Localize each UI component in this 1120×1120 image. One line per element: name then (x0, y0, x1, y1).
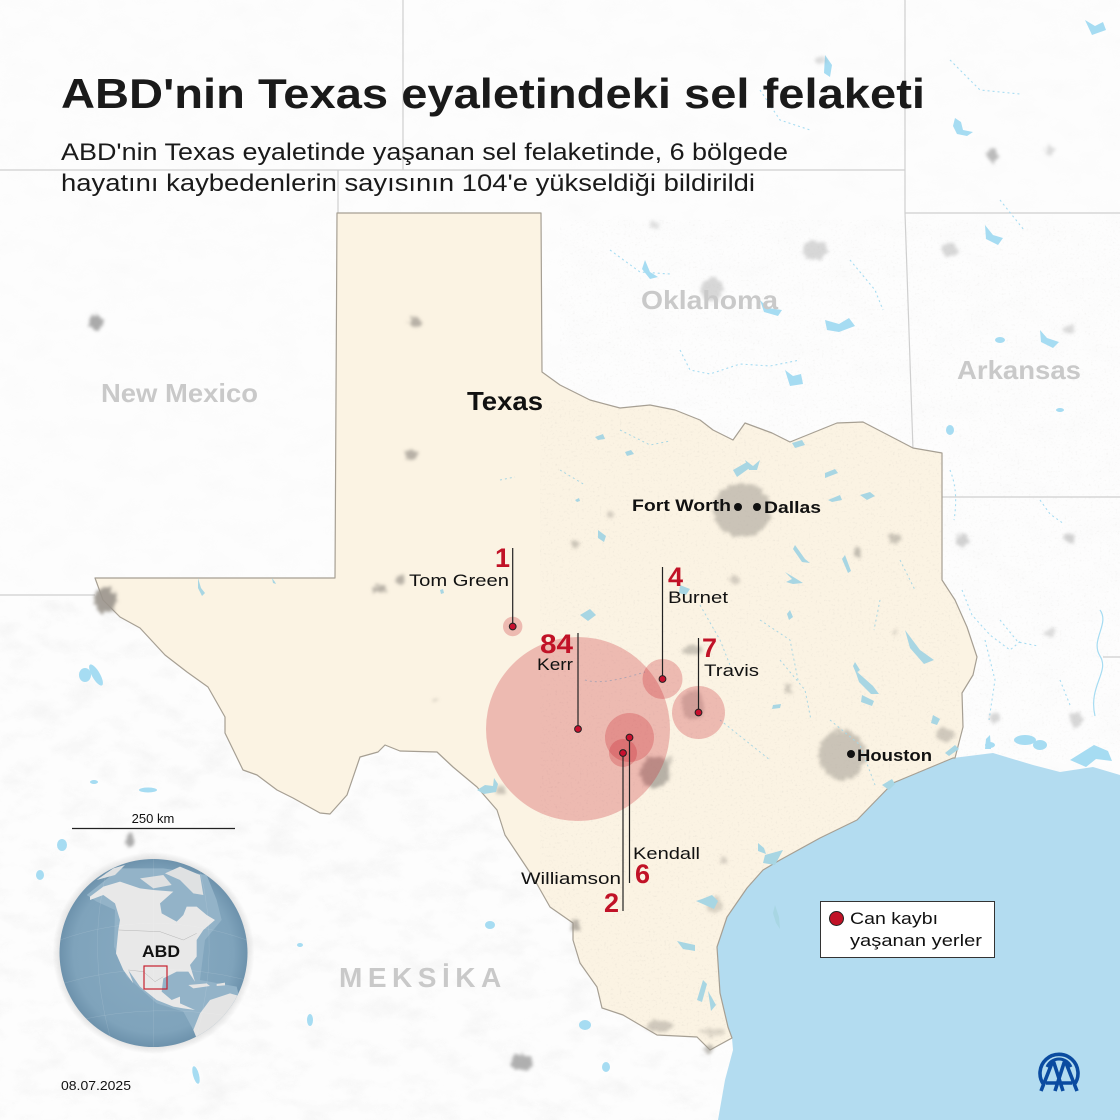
Kerr (537, 629, 573, 674)
Travis (702, 633, 759, 680)
gulf of Mexico water (717, 753, 1120, 1120)
Kendall: 6 (635, 859, 650, 889)
locator globe (52, 852, 254, 1054)
state and graticule lines (118, 930, 197, 982)
Kendall (633, 844, 700, 889)
Kerr: Kerr (537, 655, 573, 674)
Texas cities and lakes (94, 317, 960, 1055)
background map (220, 220, 1119, 1092)
Travis: Travis (704, 661, 759, 680)
Dallas: Dallas (764, 498, 821, 517)
neighbouring region labels: Oklahoma (641, 285, 779, 315)
Williamson (521, 869, 621, 918)
Kerr: 84 (540, 629, 573, 659)
Travis: 7 (702, 633, 717, 663)
Burnet (668, 562, 728, 607)
locator square (144, 966, 167, 989)
state borders (0, 0, 1120, 657)
legend (820, 902, 994, 958)
casualty labels (409, 543, 759, 918)
title: ABD'nin Texas eyaletindeki sel felaketi (61, 70, 925, 117)
Burnet: 4 (668, 562, 683, 592)
neighbouring region labels (101, 285, 1081, 993)
Texas state shape (95, 213, 977, 1050)
Williamson: 2 (604, 888, 619, 918)
Tom Green: 1 (495, 543, 510, 573)
Tom Green: Tom Green (409, 571, 509, 590)
ABD label: ABD (142, 942, 180, 961)
Tom Green (409, 543, 510, 590)
subtitle (61, 139, 788, 197)
scale bar: 250 km (132, 811, 174, 826)
legend: Can kaybı (850, 909, 938, 928)
Burnet: Burnet (668, 588, 728, 607)
leader lines and markers (509, 548, 702, 911)
Fort Worth: Fort Worth (632, 496, 731, 515)
neighbouring region labels: New Mexico (101, 378, 258, 408)
neighbouring region labels: Arkansas (957, 355, 1081, 385)
arctic islands and Greenland (97, 865, 203, 895)
Kendall: Kendall (633, 844, 700, 863)
Williamson: Williamson (521, 869, 621, 888)
city labels (632, 496, 932, 765)
continental shelf (87, 868, 240, 1030)
South America and Caribbean (188, 982, 238, 1037)
subtitle: ABD'nin Texas eyaletinde yaşanan sel felaketinde, 6 bölgede (61, 139, 788, 166)
Houston: Houston (857, 746, 932, 765)
North America land (90, 882, 215, 1010)
Texas label: Texas (467, 386, 543, 416)
neighbouring region labels: MEKSİKA (339, 962, 503, 993)
AA logo (1040, 1054, 1078, 1091)
legend: yaşanan yerler (850, 931, 982, 950)
date: 08.07.2025 (61, 1078, 131, 1093)
proportional circles (486, 617, 725, 821)
subtitle: hayatını kaybedenlerin sayısının 104'e yükseldiği bildirildi (61, 170, 755, 197)
